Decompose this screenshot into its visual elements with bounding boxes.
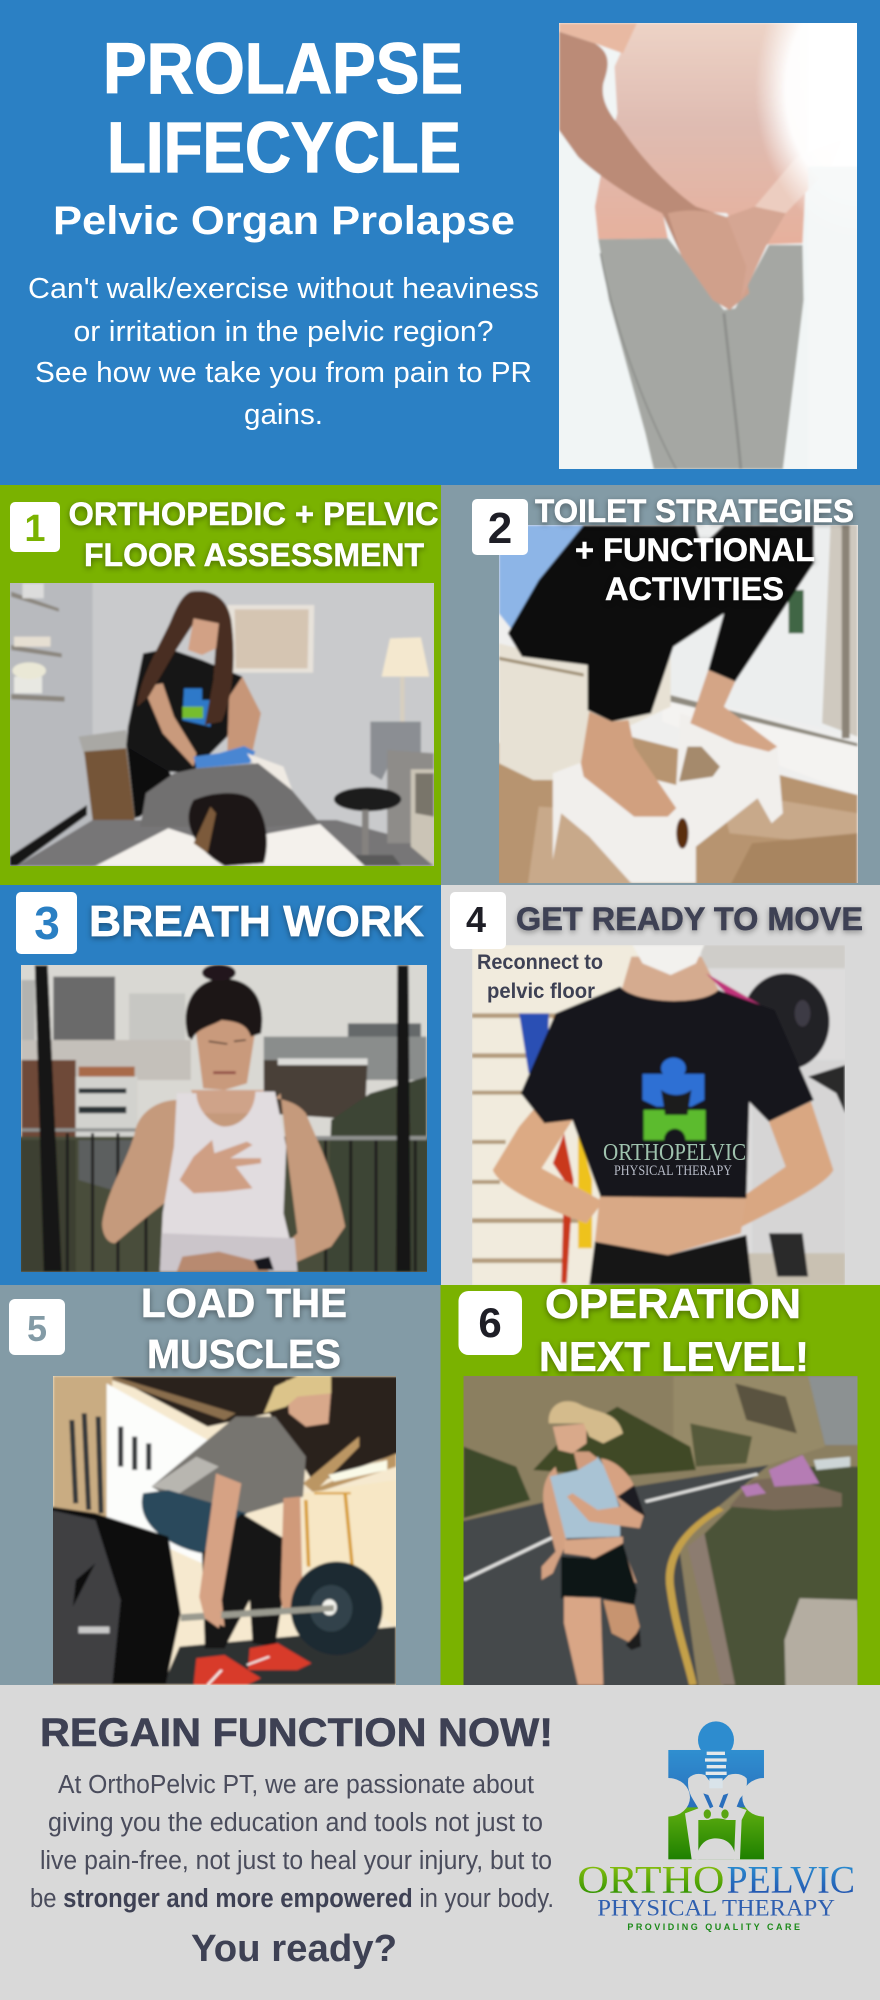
panel: step 5 [0,1280,441,1688]
panel: step 2 [441,485,880,887]
photo caption: Reconnect to [477,951,603,974]
number badge 3 [16,892,77,954]
panel: step 3 [0,885,441,1285]
number badge 4: 4 [466,899,486,940]
photo caption: pelvic floor [487,980,595,1003]
photo: reconnect to pelvic floor [469,943,850,1287]
logo tagline: PROVIDING QUALITY CARE [627,1922,800,1932]
heading step 1: FLOOR ASSESSMENT [84,537,424,573]
title: LIFECYCLE [107,109,461,188]
photo: runner on road [457,1373,864,1688]
number badge 4 [450,892,506,949]
subtitle: Pelvic Organ Prolapse [53,199,515,243]
panel: header [0,0,880,486]
panel: step 6 [440,1280,880,1688]
intro text: Can't walk/exercise without heaviness [28,273,539,305]
number badge 5 [9,1299,65,1355]
heading step 5: MUSCLES [147,1331,341,1377]
logo wordmark: ORTHO [577,1858,724,1902]
photo: therapist assessment [6,580,438,868]
logo mark [647,1721,786,1859]
heading step 2 [535,493,854,607]
number badge 6 [458,1291,522,1355]
footer text: be stronger and more empowered in your body. [30,1885,554,1913]
footer text: live pain-free, not just to heal your injury, but to [40,1847,552,1875]
footer text: At OrthoPelvic PT, we are passionate about [58,1771,534,1799]
intro text: or irritation in the pelvic region? [74,316,494,348]
you ready text: You ready? [191,1928,397,1970]
number badge 1 [10,502,60,552]
panel: step 4 [441,885,880,1287]
stool body [551,748,784,883]
number badge 6: 6 [478,1299,502,1346]
heading step 6 [539,1280,809,1380]
intro text: gains. [244,399,323,431]
photo: toilet stool [494,522,861,887]
panel: step 1 [0,485,441,885]
heading step 2: TOILET STRATEGIES [535,493,854,529]
heading step 5 [141,1280,347,1377]
footer text: giving you the education and tools not just to [48,1809,543,1837]
logo: OrthoPelvic Physical Therapy [577,1721,855,1932]
logo wordmark: PHYSICAL THERAPY [597,1896,835,1922]
heading step 6: OPERATION [545,1280,801,1327]
shirt logo text: PHYSICAL THERAPY [614,1163,732,1179]
shirt logo text: ORTHOPELVIC [603,1140,746,1166]
photo: breath work on balcony [17,962,432,1275]
photo: deadlift [48,1373,401,1688]
photo caption [477,951,603,1003]
heading step 6: NEXT LEVEL! [539,1333,809,1380]
heading step 4: GET READY TO MOVE [516,901,863,937]
heading step 2: + FUNCTIONAL [575,532,815,568]
logo wordmark [577,1858,855,1922]
panel: footer call to action [0,1685,880,2000]
title [103,30,463,188]
logo wordmark: PELVIC [727,1858,855,1902]
shirt logo text [603,1140,746,1179]
intro text [28,273,539,431]
intro text: See how we take you from pain to PR [35,357,532,389]
number badge 3: 3 [34,897,60,949]
number badge 2: 2 [488,504,512,553]
photo: woman holding pelvis [559,23,857,469]
number badge 2 [472,499,528,555]
heading step 5: LOAD THE [141,1280,347,1326]
heading step 1: ORTHOPEDIC + PELVIC [68,496,438,532]
title: PROLAPSE [103,30,463,109]
heading step 1 [68,496,438,573]
footer heading: REGAIN FUNCTION NOW! [40,1711,553,1755]
number badge 1: 1 [24,508,46,550]
heading step 3: BREATH WORK [89,897,424,946]
number badge 5: 5 [27,1308,47,1349]
footer text [30,1771,554,1913]
heading step 2: ACTIVITIES [605,571,784,607]
